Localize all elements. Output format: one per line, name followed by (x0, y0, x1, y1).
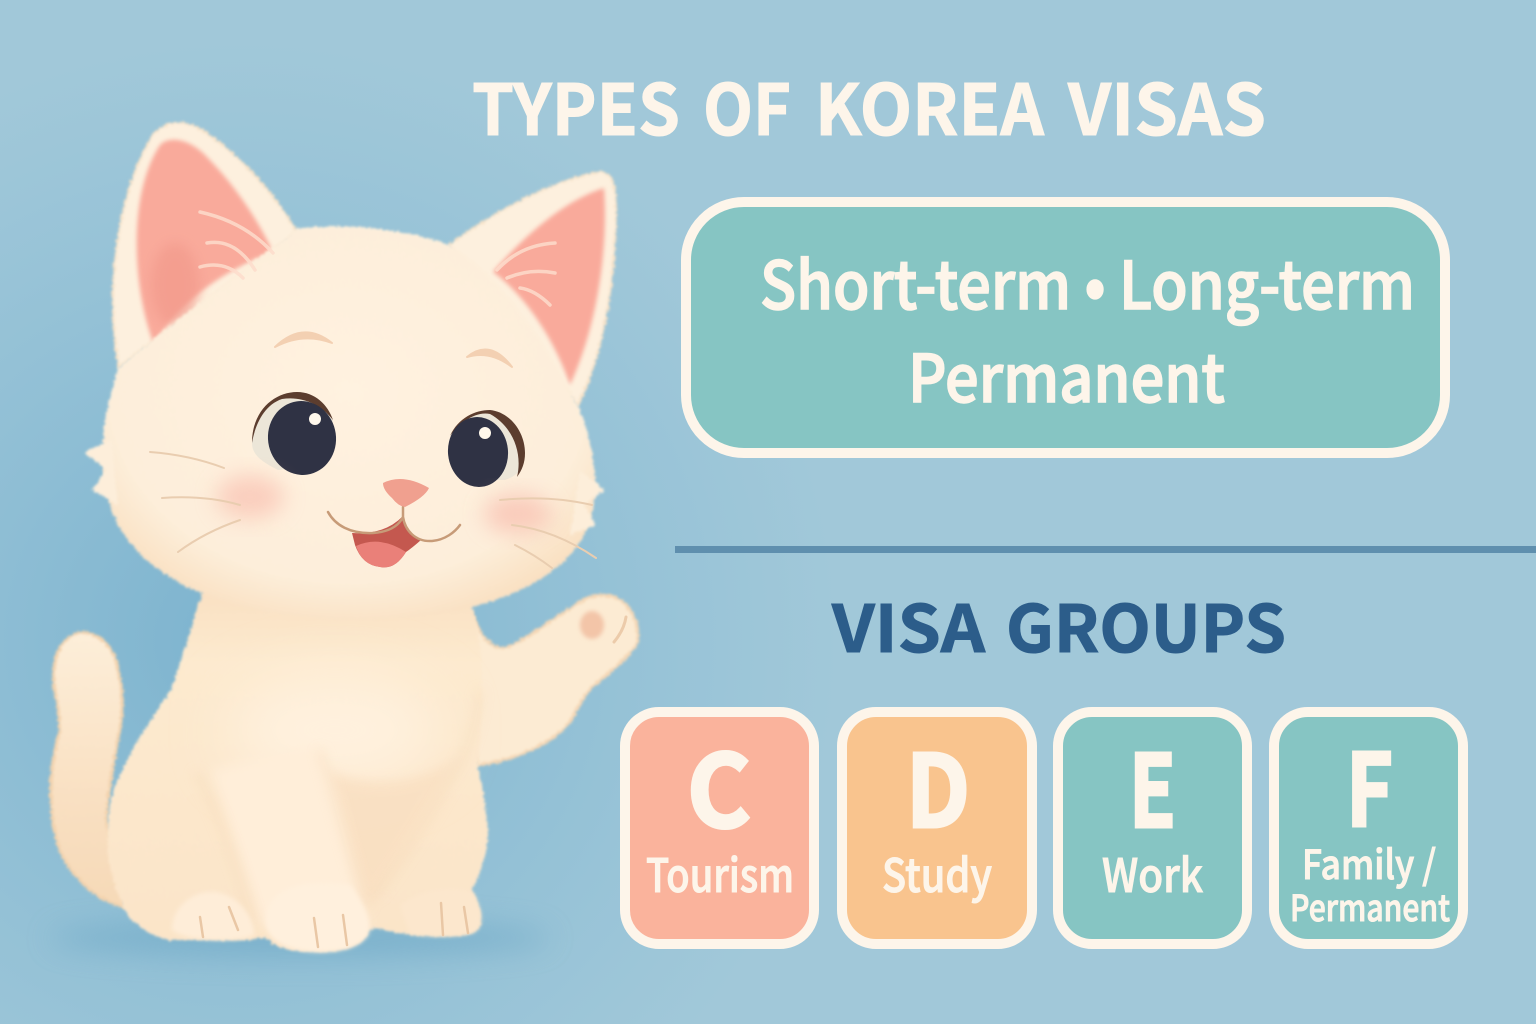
text: short-term and long-term: Short-term • Long-term (760, 233, 1415, 329)
card: D study: Study (882, 840, 992, 906)
card: E work: Work (1102, 840, 1203, 906)
tongue and mouth (352, 516, 421, 567)
title: VISAS (1067, 55, 1266, 156)
body highlight (230, 675, 440, 785)
card: C tourism (625, 711, 814, 944)
heading: visa groups: GROUPS (1006, 577, 1286, 671)
ear fur (200, 212, 555, 305)
illustration: kitten (50, 123, 638, 956)
title: OF (703, 55, 791, 156)
text: permanent: Permanent (908, 326, 1225, 422)
card: D study: D (906, 711, 970, 856)
ear left inner (137, 140, 273, 345)
head (103, 226, 595, 620)
card: F family / permanent: F (1346, 710, 1393, 855)
card: F family / permanent: Permanent (1290, 880, 1450, 932)
title: KOREA (815, 55, 1045, 156)
nose (383, 479, 429, 507)
title (472, 55, 1266, 156)
ear right (449, 172, 616, 405)
ground shadow (50, 920, 550, 956)
body creases (196, 690, 480, 925)
ear right inner (493, 188, 605, 385)
paws (172, 883, 481, 952)
tail (51, 632, 124, 907)
card: E work (1058, 711, 1247, 944)
body (107, 590, 488, 952)
card: F family / permanent (1274, 710, 1463, 944)
card: E work: E (1129, 711, 1176, 856)
chest shading (322, 755, 462, 905)
card: D study (842, 711, 1032, 944)
card: F family / permanent: Family / (1302, 833, 1436, 891)
muzzle lines (328, 507, 460, 541)
panel: visa duration types (686, 202, 1445, 453)
cheeks (216, 475, 284, 519)
card: C tourism: C (687, 711, 751, 856)
eye right (445, 410, 525, 490)
raised arm (460, 595, 638, 765)
ear left (113, 123, 297, 367)
heading: visa groups: VISA (831, 577, 985, 671)
front leg (212, 745, 367, 945)
eye left (252, 392, 341, 479)
cheek tufts (84, 440, 118, 505)
card: C tourism: Tourism (646, 840, 794, 906)
whiskers (150, 452, 596, 568)
heading: visa groups (831, 577, 1286, 671)
title: TYPES (472, 55, 680, 156)
eyebrows (275, 332, 512, 367)
paw pad (580, 611, 604, 639)
